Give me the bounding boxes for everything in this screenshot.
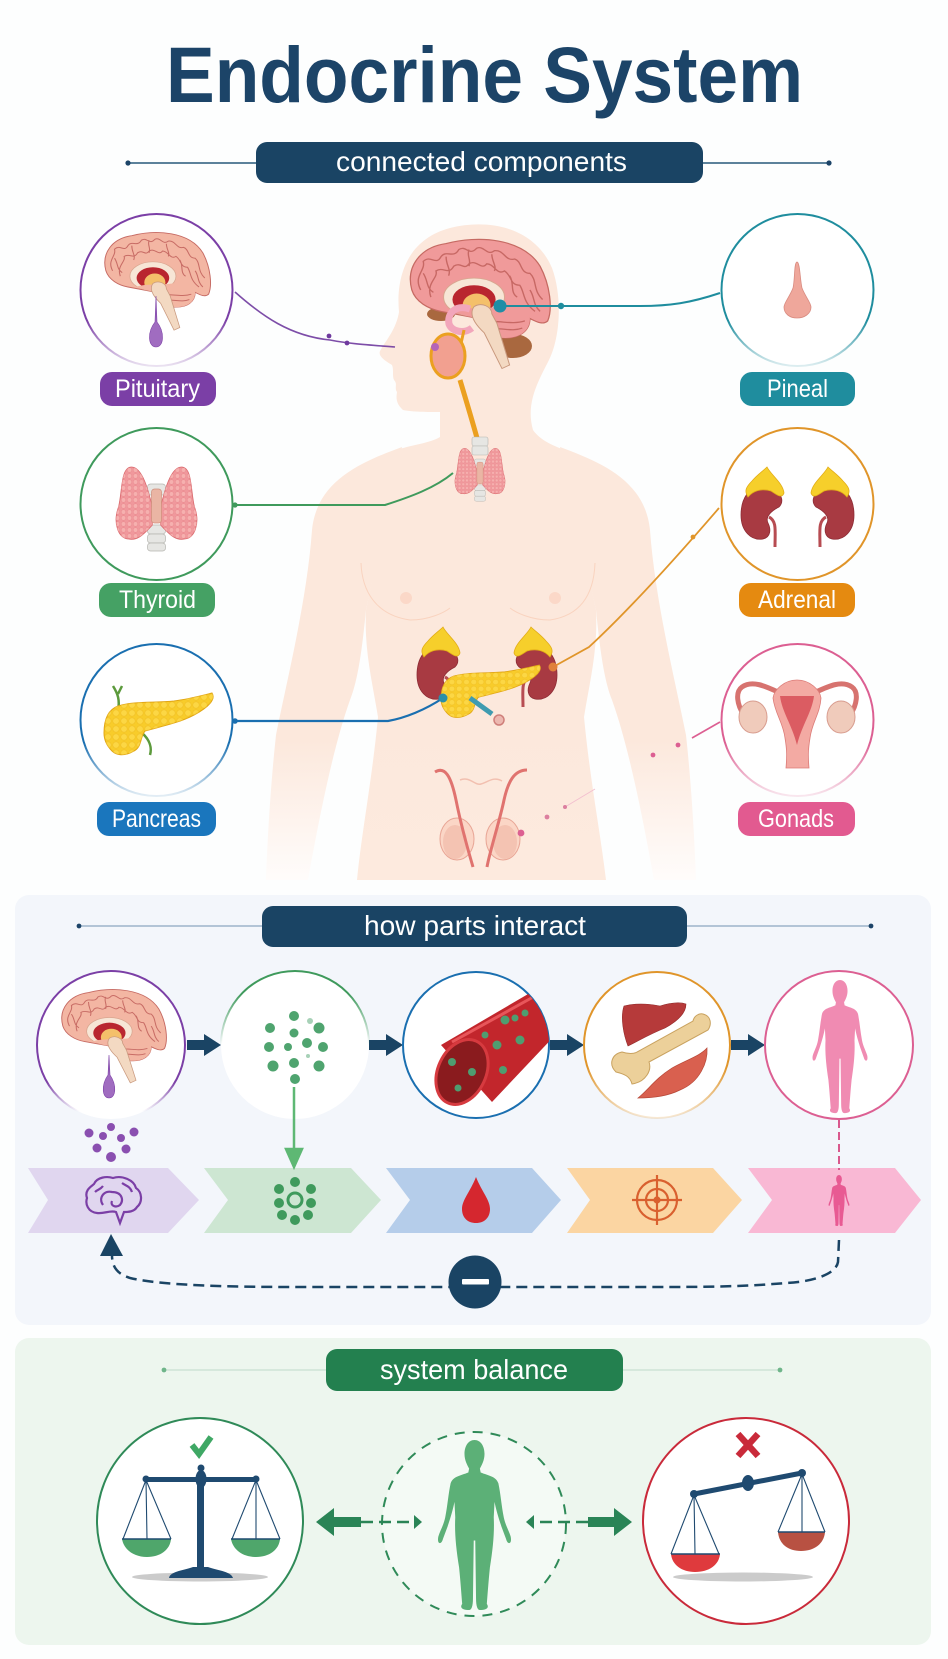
pancreas in abdomen (441, 665, 540, 718)
step 2 chevron (204, 1168, 381, 1233)
component: adrenal (722, 428, 874, 617)
central body diagram (266, 224, 696, 880)
hypothalamus ring (449, 308, 472, 331)
label: Thyroid (99, 583, 215, 617)
panel: how parts interact (15, 895, 931, 1325)
component: pineal (722, 214, 874, 406)
brain in head (410, 239, 550, 369)
dashed link to chevron (838, 1120, 840, 1170)
icon: blood drop (462, 1177, 490, 1223)
icon: bone (612, 1014, 710, 1084)
icon: brain with pituitary (105, 233, 211, 330)
testes (435, 770, 527, 867)
minus badge (448, 1256, 502, 1308)
connector: pancreas (232, 694, 448, 724)
component: thyroid (80, 428, 232, 617)
section heading (77, 906, 873, 947)
icon: uterus and ovaries (738, 680, 856, 768)
icon: target (632, 1175, 682, 1225)
connector: gonads (518, 722, 720, 836)
icon: pineal gland (784, 262, 811, 318)
circle: imbalanced (643, 1418, 849, 1624)
panel: system balance (15, 1338, 931, 1645)
label: Pancreas: Pancreas (112, 805, 201, 833)
circle: target organs (584, 972, 730, 1118)
label: Pineal (740, 372, 855, 406)
pituitary gland and stalk (431, 330, 477, 438)
step 1 chevron (28, 1168, 199, 1233)
icon: tilted scale (671, 1469, 825, 1582)
circle: balanced (97, 1418, 303, 1624)
label: Pituitary: Pituitary (115, 375, 200, 403)
adrenals and kidneys (417, 627, 557, 707)
icon: green body (438, 1440, 511, 1610)
circle: bloodstream (403, 972, 560, 1118)
label: Adrenal: Adrenal (758, 586, 836, 614)
icon: muscle (638, 1048, 707, 1098)
icon: blood vessel (434, 994, 549, 1106)
hormone particles: purple (84, 1123, 138, 1162)
component: gonads (722, 644, 874, 836)
cerebellum shading (427, 307, 532, 358)
icon: thyroid (116, 467, 197, 551)
icon: brain (62, 990, 166, 1083)
label: Thyroid: Thyroid (119, 586, 196, 614)
label: Gonads: Gonads (758, 805, 834, 833)
thyroid in neck (455, 437, 505, 501)
dashed body circle (382, 1432, 566, 1616)
connector: pituitary (235, 292, 395, 347)
icon: adrenal and kidney pair (741, 467, 854, 547)
connector: adrenal (548, 508, 719, 672)
icon: person (829, 1175, 849, 1226)
step 3 chevron (386, 1168, 561, 1233)
circle: gland release (37, 971, 185, 1119)
section heading: system balance (380, 1354, 568, 1385)
body silhouette (266, 224, 696, 880)
icon: green hormone dots (264, 1011, 328, 1084)
icon: pink body (813, 980, 867, 1113)
component: pancreas (80, 644, 232, 836)
feedback loop (100, 1234, 839, 1308)
icon: green dot cluster (274, 1177, 316, 1225)
icon: liver (622, 1003, 686, 1046)
circle: hormones (221, 971, 369, 1167)
arrow: hormones down (286, 1087, 302, 1167)
label: Pineal: Pineal (767, 375, 828, 403)
icon: checkmark (192, 1437, 211, 1454)
component: pituitary (80, 214, 232, 406)
section heading: how parts interact (364, 910, 586, 941)
icon: droplet (103, 1055, 115, 1098)
section heading (162, 1349, 782, 1391)
section heading: connected components: connected components (336, 146, 627, 177)
icon: balanced scale (122, 1464, 280, 1582)
section heading: connected components (125, 142, 832, 183)
icon: purple droplet (149, 296, 163, 347)
connector: thyroid (232, 473, 453, 508)
connector: pineal (494, 293, 720, 312)
title: Endocrine System (166, 30, 803, 119)
step 4 chevron (567, 1168, 742, 1233)
circle: whole body (765, 971, 913, 1119)
step 5 chevron (748, 1168, 921, 1233)
duct (470, 698, 504, 725)
label: Adrenal (739, 583, 855, 617)
icon: brain outline (86, 1177, 141, 1223)
arrow: right balance (526, 1508, 632, 1536)
label: Pituitary (100, 372, 216, 406)
label: Gonads (738, 802, 855, 836)
arrow: left balance (316, 1508, 422, 1536)
process arrows (187, 1034, 765, 1056)
icon: pancreas (104, 686, 213, 755)
arrowhead (100, 1234, 123, 1256)
icon: cross (738, 1434, 758, 1456)
